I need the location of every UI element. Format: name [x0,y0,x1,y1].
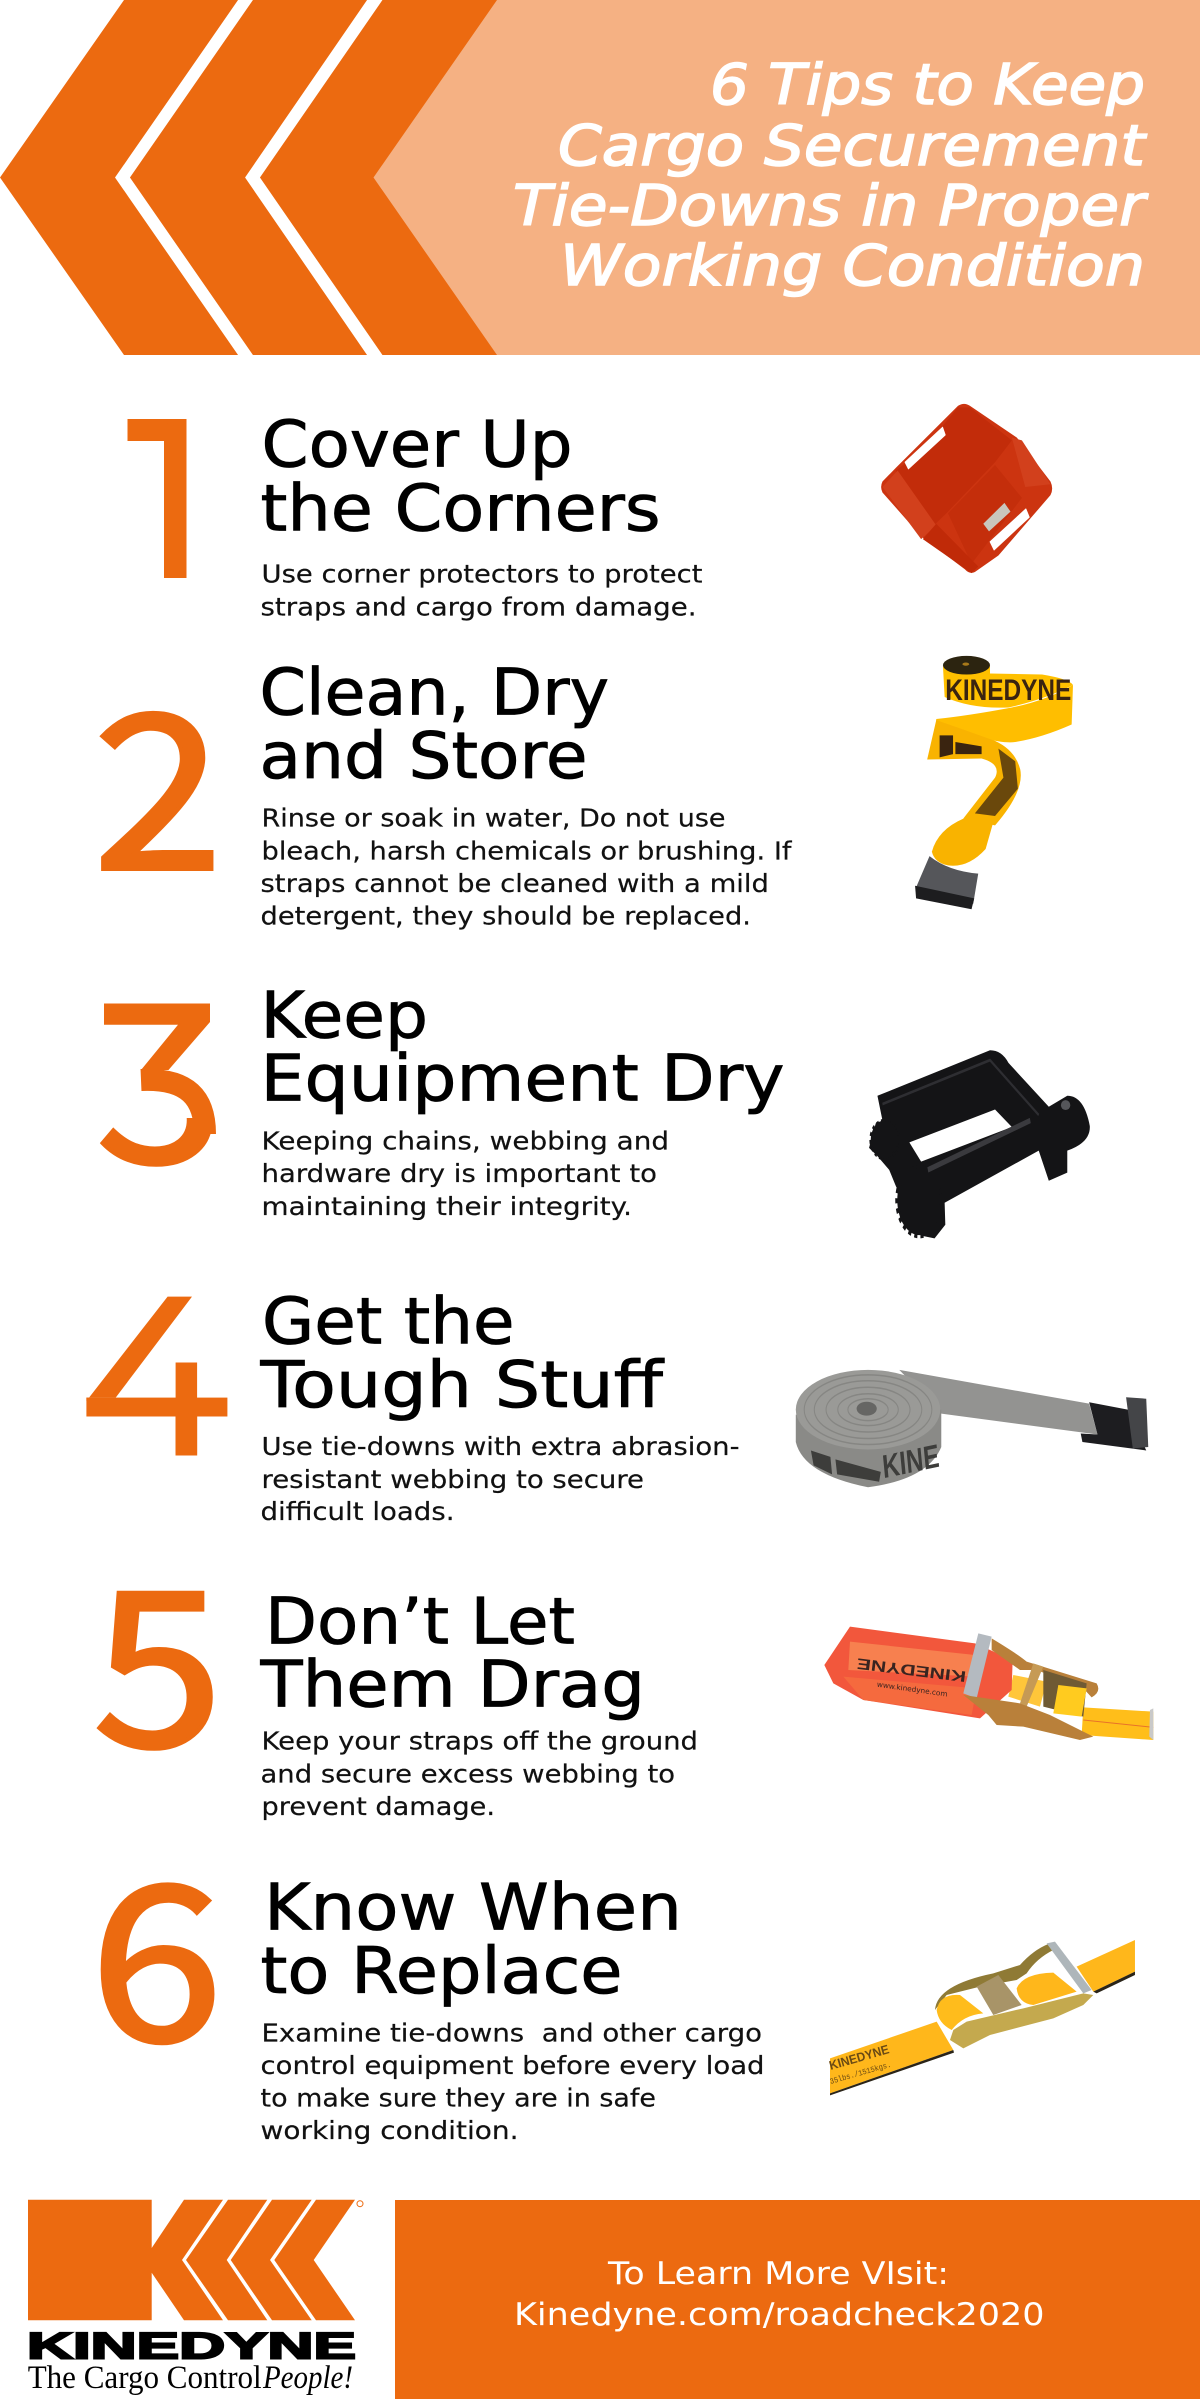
icon: yellow ratchet strap: 35lbs./1515kgs. [829,2061,892,2087]
tip 4 description [260,1432,740,1526]
number 4: 4 [82,1204,232,1516]
tip 2 [93,620,1073,931]
tip 6 description: to make sure they are in safe [260,2084,656,2112]
tip 4 heading: Tough Stuff [259,1349,665,1423]
tip 5 description: prevent damage. [262,1792,495,1821]
icon: yellow ratchet strap [828,1940,1135,2095]
tip 1 description [260,560,703,622]
footer text [514,2256,1044,2333]
tip 5 description: Keep your straps off the ground [262,1726,698,1756]
tip 3 heading [260,980,784,1116]
icon: ratchet strap with red sleeve: KINEDYNE [856,1654,967,1685]
number 3 [100,1004,216,1167]
tip 1 [112,327,1052,638]
header banner [0,0,1200,355]
tip 2 description: bleach, harsh chemicals or brushing. If [262,836,793,866]
header chevrons [0,0,497,355]
footer text: To Learn More VIsit: [607,2256,949,2292]
tip 6 description [260,2018,764,2145]
tip 2 heading [260,656,609,794]
tip 6 heading [260,1872,682,2009]
footer call to action [395,2200,1200,2399]
icon: yellow winch strap: KINEDYNE [945,674,1071,707]
tip 5 description: and secure excess webbing to [260,1760,675,1788]
number 5: 5 [93,1497,223,1808]
tip 3 heading: Equipment Dry [260,1042,784,1116]
tip 4 description: Use tie-downs with extra abrasion- [262,1432,740,1461]
tip 4 heading: Get the [262,1286,514,1360]
tip 5 description [260,1726,698,1821]
tip 4 description: resistant webbing to secure [262,1465,644,1494]
title [513,53,1148,299]
header peach background [124,0,1200,355]
tip 1 heading: Cover Up [262,408,572,482]
tip 6 [90,1792,1135,2145]
icon: gray webbing coil with buckle: KINE [881,1438,941,1485]
footer logo [27,2200,363,2396]
logo wordmark: KINEDYNE [27,2325,356,2366]
tip 4 heading [259,1286,665,1423]
tip 1 description: Use corner protectors to protect [262,560,703,588]
number 1 [128,419,186,578]
tip 3 [96,913,1090,1238]
tip 2 description [260,804,793,930]
footer text: Kinedyne.com/roadcheck2020 [514,2297,1044,2333]
tip 5 [93,1497,1153,1821]
icon: black winch [869,1050,1090,1238]
number 6: 6 [90,1792,223,2102]
title: Cargo Securement [558,114,1147,179]
icon: yellow winch strap [915,656,1073,909]
tip 1 description: straps and cargo from damage. [260,592,696,622]
tip 3 description: Keeping chains, webbing and [262,1126,669,1156]
tip 5 heading: Them Drag [259,1648,645,1722]
tip 1 heading: the Corners [260,472,660,546]
tip 3 description: maintaining their integrity. [262,1192,632,1221]
number 1: 1 [112,327,238,638]
title: Working Condition [560,234,1145,299]
icon: ratchet strap with red sleeve: www.kinedyne.com [876,1680,948,1699]
tip 6 description: Examine tie-downs and other cargo [262,2018,762,2048]
tip 6 description: control equipment before every load [260,2051,764,2080]
number 4 [86,1296,228,1456]
icon: corner protector [881,404,1052,573]
tip 2 description: Rinse or soak in water, Do not use [262,804,726,832]
icon: yellow ratchet strap: KINEDYNE [828,2042,891,2073]
icon: ratchet strap with red sleeve [824,1627,1153,1740]
tip 5 heading: Don’t Let [265,1586,575,1660]
logo tagline: The Cargo Control [28,2360,262,2396]
tip 3 description [262,1126,669,1221]
tip 1 heading [260,408,660,546]
tip 4 [82,1204,1148,1526]
icon: gray webbing coil with buckle [796,1370,1148,1487]
footer orange panel [395,2200,1200,2399]
number 3: 3 [96,913,223,1224]
tip 2 description: straps cannot be cleaned with a mild [260,869,769,898]
tip 6 description: working condition. [260,2116,518,2145]
logo tagline: People! [262,2360,353,2396]
tip 3 description: hardware dry is important to [262,1159,657,1188]
tip 2 heading: Clean, Dry [260,656,609,730]
title: Tie-Downs in Proper [513,174,1148,239]
tip 2 description: detergent, they should be replaced. [260,902,751,930]
tip 3 heading: Keep [260,980,428,1054]
tip 6 heading: to Replace [260,1935,622,2009]
tip 4 description: difficult loads. [260,1497,454,1526]
number 2: 2 [93,620,223,931]
tip 2 heading: and Store [260,720,588,794]
logo mark [28,2200,363,2320]
tip 5 heading [259,1586,645,1722]
title: 6 Tips to Keep [710,53,1145,118]
tip 6 heading: Know When [264,1872,682,1946]
